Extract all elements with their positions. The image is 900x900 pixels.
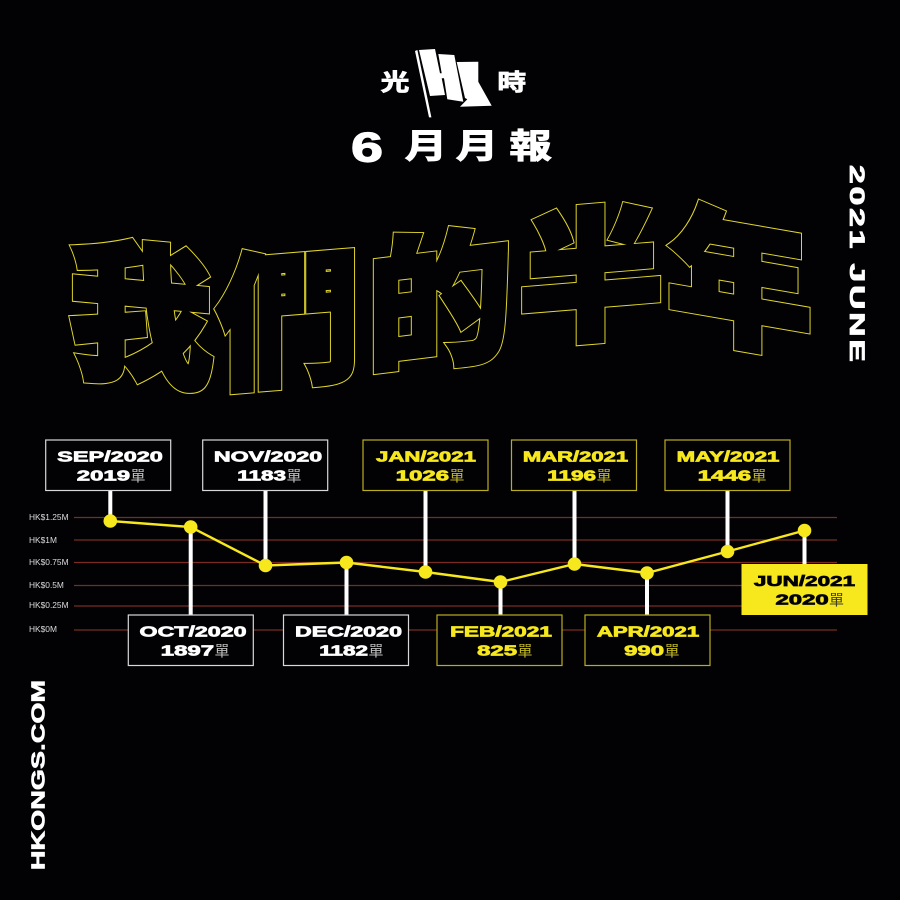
y-axis labels: HK$0.75M xyxy=(29,557,69,567)
callout: OCT/2020: 單 xyxy=(214,640,230,661)
callout: APR/2021: 990 xyxy=(624,643,664,659)
callout: JAN/2021: 1026 xyxy=(396,468,449,484)
callout: FEB/2021: 825 xyxy=(477,643,517,659)
title: 我們的半年 (outlined): 半 xyxy=(518,158,664,375)
callout: MAR/2021: 單 xyxy=(596,465,612,486)
y-axis labels: HK$0.25M xyxy=(29,600,69,610)
callout: NOV/2020: NOV/2020 xyxy=(214,449,322,465)
callout: JAN/2021: JAN/2021 xyxy=(376,448,476,465)
callout: JUN/2021 highlighted: 2020 xyxy=(776,592,829,608)
title: 我們的半年 (outlined): 年 xyxy=(667,155,812,390)
title: 我們的半年 (outlined): 我 xyxy=(69,189,213,421)
side label: 2021 JUNE: 2021 JUNE xyxy=(846,165,869,362)
title: 我們的半年 (outlined): 我 xyxy=(69,189,213,421)
callout: MAY/2021 xyxy=(665,440,790,490)
callout: MAY/2021: 1446 xyxy=(698,468,751,484)
callout: MAR/2021: 1196 xyxy=(547,468,596,484)
logo: flag mark with 光 and 時 xyxy=(381,49,526,117)
callout: DEC/2020: DEC/2020 xyxy=(295,624,402,640)
title: 我們的半年 (outlined): 們 xyxy=(215,198,360,423)
callout: DEC/2020 xyxy=(284,615,408,666)
heading: 6月月報: 月 xyxy=(405,119,447,169)
title: 我們的半年 (outlined): 的 xyxy=(367,177,512,405)
stems xyxy=(110,490,805,615)
callout: SEP/2020: 2019 xyxy=(77,468,130,484)
callout: FEB/2021: FEB/2021 xyxy=(450,624,552,640)
y-axis labels: HK$1.25M xyxy=(29,512,69,522)
data line xyxy=(110,521,805,582)
callout: OCT/2020: OCT/2020 xyxy=(140,624,246,640)
callout: JUN/2021 highlighted: 單 xyxy=(829,589,844,610)
callout: APR/2021 xyxy=(585,615,710,666)
title: 我們的半年 (outlined) xyxy=(69,155,812,423)
callout: APR/2021: 單 xyxy=(664,640,680,661)
data points xyxy=(104,514,811,589)
callout: SEP/2020: 單 xyxy=(130,465,146,486)
callout: APR/2021: APR/2021 xyxy=(597,623,699,640)
callout: FEB/2021 xyxy=(437,615,562,666)
callout: JAN/2021: 單 xyxy=(450,465,465,486)
y-axis labels: HK$1M xyxy=(29,535,57,545)
callout: OCT/2020: 1897 xyxy=(161,643,214,659)
callout: SEP/2020: SEP/2020 xyxy=(57,449,163,465)
callout: MAY/2021: 單 xyxy=(752,465,767,486)
title: 我們的半年 (outlined): 半 xyxy=(518,158,664,375)
callout: JUN/2021 highlighted: JUN/2021 xyxy=(754,574,855,590)
y-axis labels: HK$0.5M xyxy=(29,580,64,590)
callout: JUN/2021 highlighted xyxy=(742,564,868,615)
callout: MAR/2021: MAR/2021 xyxy=(523,448,628,465)
title: 我們的半年 (outlined): 們 xyxy=(215,198,360,423)
heading: 6月月報: 6 xyxy=(351,123,383,171)
callout: OCT/2020 xyxy=(128,615,253,666)
callout: FEB/2021: 單 xyxy=(518,640,533,661)
side label: HKONGS.COM: HKONGS.COM xyxy=(28,680,49,870)
grid lines xyxy=(74,518,837,630)
callout: DEC/2020: 單 xyxy=(368,640,384,661)
callout: MAR/2021 xyxy=(512,440,636,490)
callout: MAY/2021: MAY/2021 xyxy=(677,448,779,465)
callout: NOV/2020: 單 xyxy=(286,465,302,486)
callout: SEP/2020 xyxy=(46,440,171,490)
callout: JAN/2021 xyxy=(363,440,488,490)
chart: monthly revenue line chart xyxy=(29,440,868,666)
logo: flag mark with 光 and 時: 時 xyxy=(497,64,526,97)
title: 我們的半年 (outlined): 年 xyxy=(667,155,812,390)
heading: 6月月報: 報 xyxy=(509,119,552,169)
heading: 6月月報: 月 xyxy=(456,119,498,169)
callout: NOV/2020 xyxy=(203,440,328,490)
callout: NOV/2020: 1183 xyxy=(237,468,286,484)
title: 我們的半年 (outlined): 的 xyxy=(367,177,512,405)
y-axis labels: HK$0M xyxy=(29,624,57,634)
y-axis labels xyxy=(29,512,69,634)
logo: flag mark with 光 and 時: 光 xyxy=(381,64,409,97)
callout: DEC/2020: 1182 xyxy=(319,643,368,659)
heading: 6月月報 xyxy=(351,119,552,171)
